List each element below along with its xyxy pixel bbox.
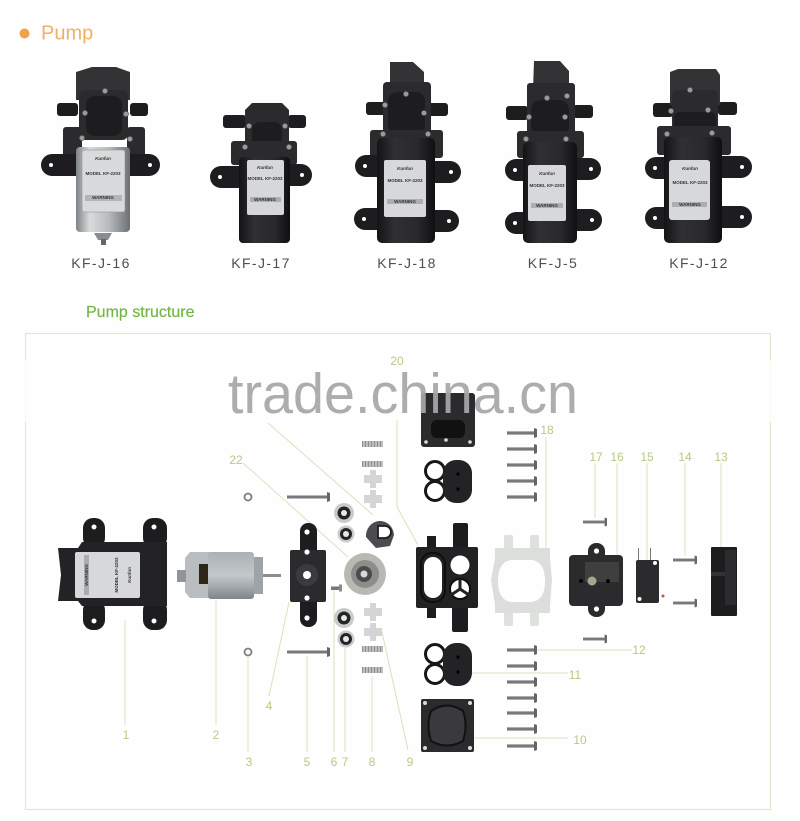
part 12: lower screws: [507, 645, 537, 751]
product: pump KF-J-12: [645, 69, 752, 243]
part 10: lower valve plate: [421, 699, 474, 752]
label: KF-J-5: KF-J-5: [528, 255, 578, 271]
part numbers: 9: [407, 755, 414, 769]
part 9: valve crosses: [364, 470, 382, 641]
heading: Pump: Pump: [41, 22, 93, 44]
part 20: central valve block: [416, 523, 478, 632]
part 22: bearing: [344, 553, 386, 595]
product: pump KF-J-12: WARNING: [679, 202, 701, 207]
panel frame: [26, 334, 770, 810]
part 1: pump housing: MODEL KF-2203: [114, 557, 119, 592]
part numbers: 18: [540, 423, 554, 437]
part numbers: 20: [390, 354, 404, 368]
part numbers: 22: [229, 453, 243, 467]
part 19: white diaphragm: [491, 535, 552, 626]
product: pump KF-J-5: Kunfun: [539, 171, 555, 176]
product: pump KF-J-18: Kunfun: [397, 166, 413, 171]
product: pump KF-J-18: MODEL KF-2203: [388, 178, 423, 183]
label: KF-J-18: KF-J-18: [377, 255, 437, 271]
product: pump KF-J-16: Kunfun: [95, 156, 111, 161]
product: pump KF-J-18: [354, 62, 461, 243]
heading: Pump structure: Pump structure: [86, 304, 195, 321]
part 11: lower gasket: [426, 643, 472, 686]
product: pump KF-J-5: WARNING: [536, 203, 558, 208]
product: pump KF-J-12: Kunfun: [682, 166, 698, 171]
part numbers: 11: [569, 668, 582, 682]
label: KF-J-16: KF-J-16: [71, 255, 131, 271]
part 6: small screw: [331, 584, 342, 592]
part 2: motor: [177, 552, 281, 599]
part 18: upper screws: [507, 428, 537, 502]
part 7: rubber rings: [334, 503, 354, 648]
part: upper gasket: [426, 460, 472, 503]
product: pump KF-J-5: [505, 61, 602, 243]
part numbers: 2: [213, 728, 220, 742]
part numbers: 10: [573, 733, 587, 747]
part 21: cam: [366, 521, 394, 548]
part 5: long bolts: [287, 492, 330, 657]
part 14: switch screws: [673, 556, 697, 608]
part numbers: [123, 354, 728, 769]
part numbers: 15: [640, 450, 654, 464]
product: pump KF-J-16: MODEL KF-2203: [86, 171, 121, 176]
product: pump KF-J-12: MODEL KF-2203: [673, 180, 708, 185]
part 13: switch cover: [711, 547, 737, 616]
product: pump KF-J-5: MODEL KF-2203: [530, 183, 565, 188]
part 15: micro switch: [636, 548, 664, 603]
part numbers: 17: [589, 450, 603, 464]
leader lines: [125, 420, 721, 752]
part: upper valve plate: [421, 393, 475, 447]
product: pump KF-J-17: WARNING: [254, 197, 276, 202]
part numbers: 8: [369, 755, 376, 769]
part numbers: 13: [714, 450, 728, 464]
part 3: washers: [244, 494, 252, 656]
product: pump KF-J-17: Kunfun: [257, 165, 273, 170]
part 17: tapping screws: [583, 518, 607, 644]
part numbers: 7: [342, 755, 349, 769]
part 8: springs: [362, 441, 383, 673]
label: KF-J-12: KF-J-12: [669, 255, 729, 271]
product: pump KF-J-16: [41, 67, 160, 245]
part 1: pump housing: Kunfun: [127, 567, 132, 583]
part 1: pump housing: WARNING: [84, 564, 89, 586]
part numbers: 16: [610, 450, 624, 464]
panel: exploded pump structure diagram: [20, 334, 776, 810]
part numbers: 1: [123, 728, 130, 742]
product: pump KF-J-17: [210, 103, 312, 243]
label: KF-J-17: KF-J-17: [231, 255, 291, 271]
product: pump KF-J-16: WARNING: [92, 195, 114, 200]
part 4: motor bracket: [290, 523, 326, 627]
part 16: switch housing: [569, 543, 623, 617]
watermark: trade.china.cn: trade.china.cn: [228, 362, 578, 426]
product: pump KF-J-17: MODEL KF-2203: [248, 176, 283, 181]
part numbers: 14: [678, 450, 692, 464]
part numbers: 5: [304, 755, 311, 769]
part numbers: 3: [246, 755, 253, 769]
part 1: pump housing: [58, 518, 167, 630]
part numbers: 12: [632, 643, 646, 657]
product: pump KF-J-18: WARNING: [394, 199, 416, 204]
part numbers: 4: [266, 699, 273, 713]
part numbers: 6: [331, 755, 338, 769]
